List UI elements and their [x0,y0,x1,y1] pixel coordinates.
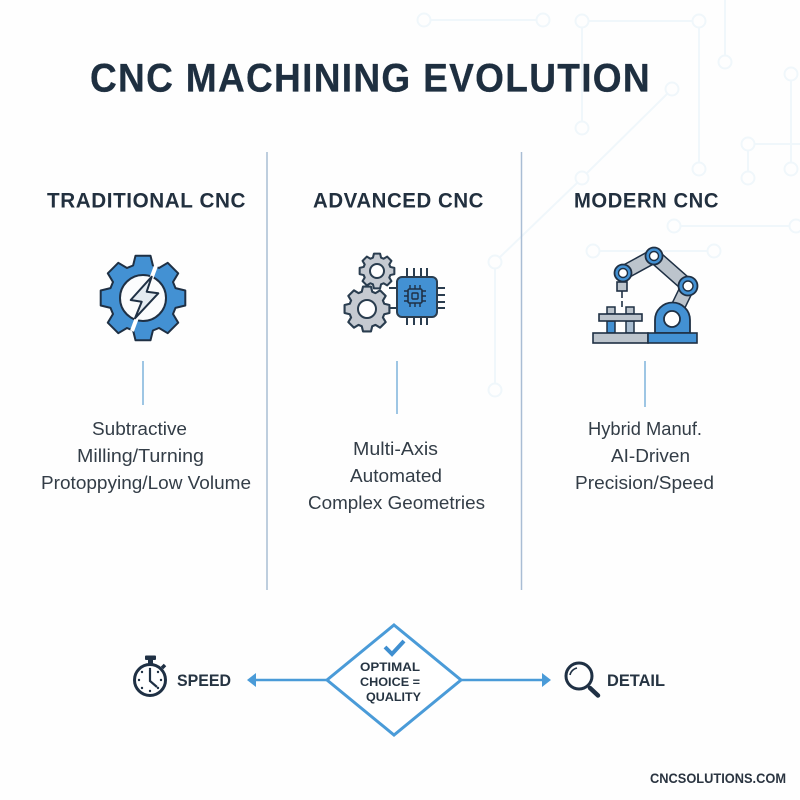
label: speed: SPEED [177,672,231,690]
label: detail: DETAIL [607,672,665,690]
connector line [396,361,398,414]
text block: traditional CNC features [41,419,251,493]
text block: advanced CNC features: Automated [350,466,442,486]
diamond: optimal choice [327,625,461,735]
icon: magnifying glass [566,663,598,696]
diamond text [360,660,421,704]
text block: advanced CNC features [308,439,485,513]
connector line [142,361,144,405]
panel: traditional CNC [41,188,251,493]
arrow: toward speed [247,673,327,687]
column dividers [267,152,522,590]
heading: traditional CNC: TRADITIONAL CNC [47,188,246,212]
diamond text: QUALITY [366,690,421,704]
text block: advanced CNC features: Complex Geometries [308,493,485,513]
icon: check mark [385,641,404,654]
footer website: CNCSOLUTIONS.COM [650,771,786,786]
icon: gears and chip [345,254,445,331]
text block: modern CNC features: Precision/Speed [575,473,714,493]
text block: advanced CNC features: Multi-Axis [353,439,438,459]
text block: modern CNC features: Hybrid Manuf. [588,419,702,439]
heading: modern CNC: MODERN CNC [574,188,719,212]
arrow: toward detail [461,673,551,687]
diamond text: CHOICE = [360,675,420,689]
heading: advanced CNC: ADVANCED CNC [313,188,484,212]
diamond text: OPTIMAL [360,660,420,674]
text block: traditional CNC features: Milling/Turning [77,446,204,466]
title: CNC MACHINING EVOLUTION [90,56,651,100]
background circuit pattern [418,0,800,396]
icon: robot arm [593,248,698,343]
connector line [644,361,646,407]
panel: advanced CNC [308,188,485,513]
text block: traditional CNC features: Subtractive [92,419,187,439]
text block: modern CNC features [575,419,714,493]
text block: modern CNC features: AI-Driven [611,446,690,466]
icon: gear with lightning bolt [101,256,185,340]
icon: stopwatch [134,656,166,696]
panel: modern CNC [574,188,719,493]
text block: traditional CNC features: Protoppying/Low Volume [41,473,251,493]
